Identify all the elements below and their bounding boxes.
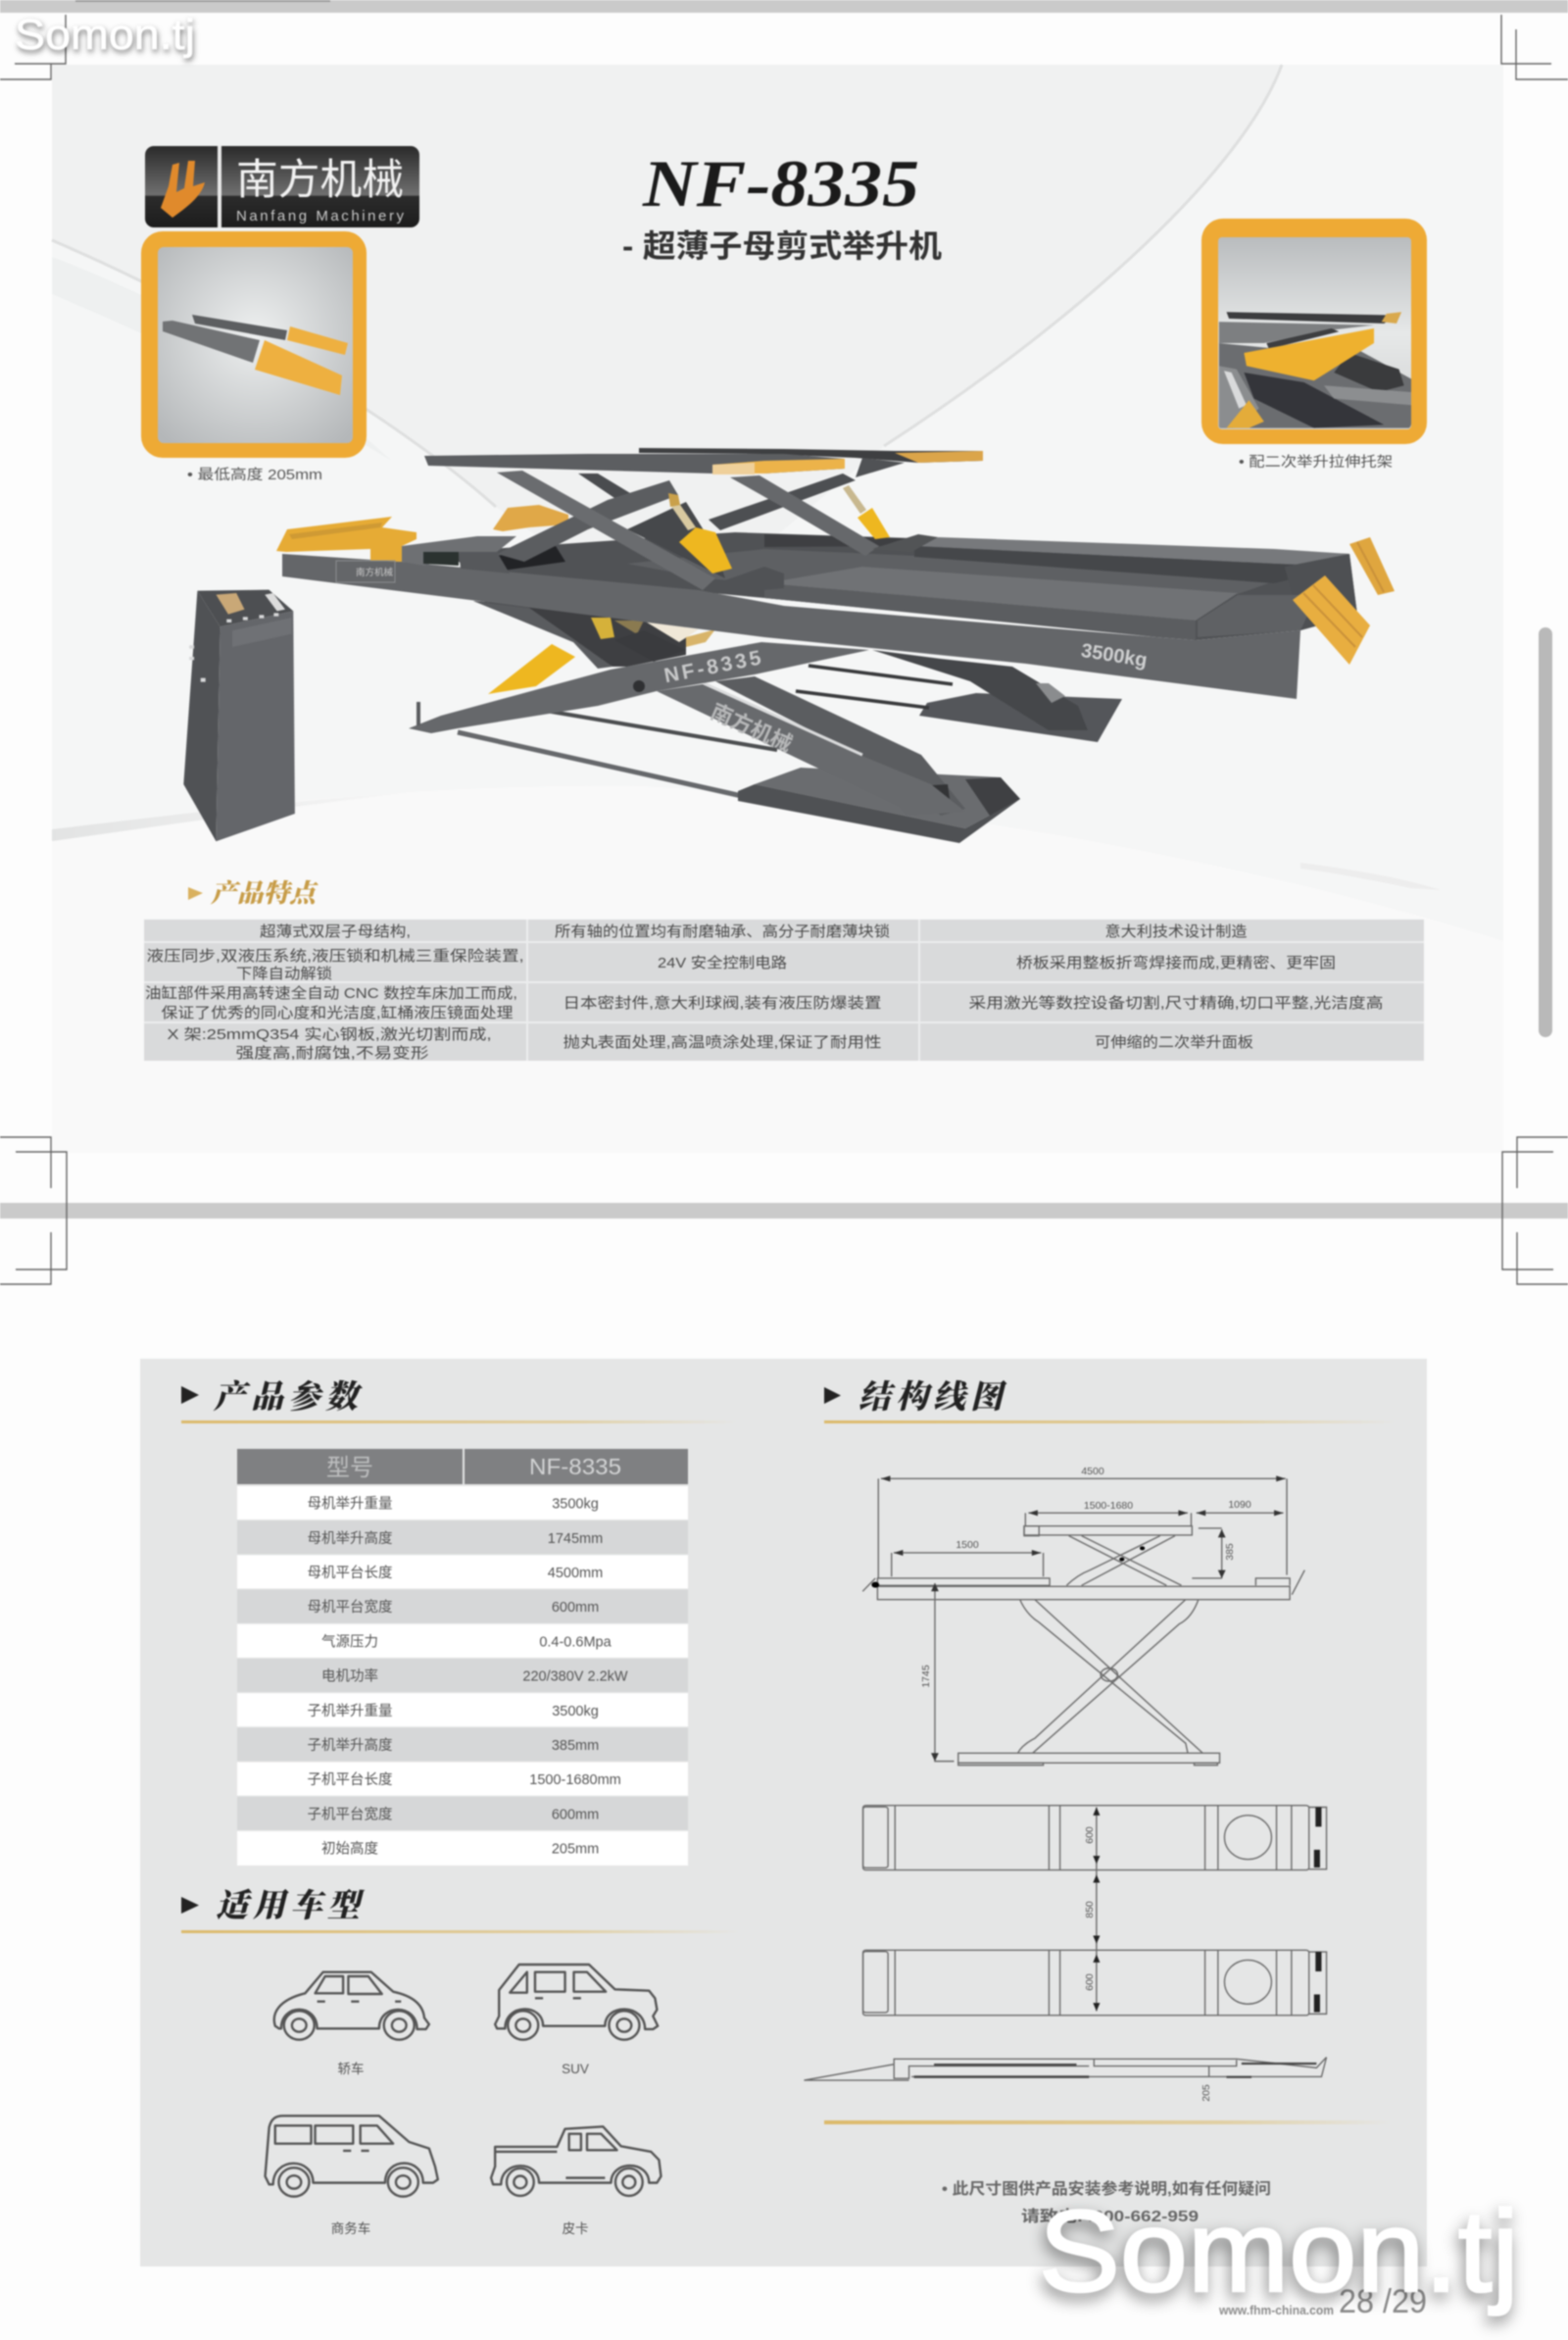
upper scissor back arms	[578, 473, 938, 556]
dimension arrowheads	[871, 1475, 1286, 1762]
table: parameters: 母机举升高度	[308, 1530, 392, 1547]
label: pickup: 皮卡	[563, 2221, 588, 2236]
diagram: top plan view: 600	[1084, 1973, 1096, 1991]
footer: website and page number	[1218, 2283, 1427, 2320]
yellow ramps left	[276, 517, 416, 562]
icon: van	[266, 2116, 438, 2197]
table: product features: 采用激光等数控设备切割,尺寸精确,切口平整,光洁度高	[968, 994, 1384, 1012]
table: product features: 意大利技术设计制造	[1105, 922, 1247, 940]
heading: structure drawing	[824, 1379, 1396, 1423]
diagram: top plan view	[863, 1806, 1327, 2016]
back lower arm	[715, 676, 965, 816]
heading: structure drawing: 结构线图	[858, 1379, 1007, 1416]
connecting rods	[458, 711, 777, 796]
table: product features: X 架:25mmQ354 实心钢板,激光切割而成,	[167, 1025, 492, 1043]
diagram: top plan view: 850	[1084, 1901, 1096, 1918]
table: product features: 所有轴的位置均有耐磨轴承、高分子耐磨薄块锁	[555, 923, 890, 940]
diagram: profile view	[804, 2058, 1327, 2102]
main side beam	[282, 554, 1300, 699]
table: product features: 强度高,耐腐蚀,不易变形	[235, 1044, 429, 1062]
table: parameters: 0.4-0.6Mpa	[539, 1634, 612, 1650]
table: parameters: 气源压力	[321, 1633, 378, 1650]
section: structure line drawing	[804, 1379, 1396, 2225]
upper scissor front arms	[497, 471, 784, 593]
main platform base	[446, 532, 1357, 640]
heading: product features: 产品特点	[210, 879, 318, 908]
scrollbar	[1539, 627, 1552, 1037]
note: dimensions disclaimer	[942, 2179, 1271, 2225]
diagram: side elevation with dimensions: 1090	[1228, 1499, 1251, 1511]
section: product parameters	[181, 1379, 737, 1866]
icon: sedan	[274, 1972, 429, 2040]
main image: scissor lift and control box: 南方机械	[708, 699, 796, 757]
label: SUV: SUV	[562, 2062, 589, 2076]
yellow lower cylinder	[488, 644, 575, 694]
heading: applicable vehicles: 适用车型	[216, 1888, 366, 1924]
top grey bar	[0, 0, 1568, 13]
table: product features: 桥板采用整板折弯焊接而成,更精密、更牢固	[1016, 954, 1336, 971]
caption: secondary lift bracket: • 配二次举升拉伸托架	[1239, 454, 1393, 471]
table: product features: 下降自动解锁	[236, 966, 332, 982]
diagram: side elevation with dimensions: 1500-1680	[1084, 1500, 1133, 1512]
mini logo on beam	[336, 561, 395, 582]
photo: secondary lift bracket	[1201, 219, 1427, 444]
icon: SUV	[495, 1965, 658, 2040]
table: product features	[144, 920, 1424, 1062]
table: parameters: 4500mm	[548, 1566, 603, 1581]
diagram: side elevation with dimensions: 1500	[956, 1539, 979, 1551]
yellow ramp middle	[493, 505, 568, 531]
label: van: 商务车	[331, 2220, 370, 2236]
diagram: side elevation with dimensions	[862, 1466, 1304, 1766]
table: parameters: 220/380V 2.2kW	[522, 1669, 628, 1685]
table: product features: 抛丸表面处理,高温喷涂处理,保证了耐用性	[563, 1034, 882, 1051]
caption: lowest height: • 最低高度 205mm	[187, 467, 322, 483]
table: parameters: 子机举升重量	[308, 1703, 392, 1719]
logo: Nanfang Machinery: 南方机械	[236, 157, 404, 204]
table: parameters: 600mm	[552, 1807, 599, 1822]
background lower sweep	[52, 786, 1503, 1153]
black end stops	[1093, 1808, 1321, 2013]
logo: Nanfang Machinery	[145, 146, 419, 227]
watermark: small top-left: Somon.tj	[15, 11, 195, 59]
mini logo on beam: 南方机械	[356, 567, 393, 578]
note: dimensions disclaimer: • 此尺寸图供产品安装参考说明,如有任何疑问	[942, 2179, 1271, 2198]
table: parameters: 205mm	[552, 1842, 599, 1858]
table: parameters: 子机举升高度	[308, 1737, 392, 1754]
table: parameters: 子机平台宽度	[308, 1806, 392, 1822]
background lens shape	[52, 65, 1282, 627]
table: parameters: 子机平台长度	[308, 1771, 392, 1788]
panel: lower specifications page	[140, 1359, 1427, 2266]
photo: lowest height detail	[141, 231, 367, 458]
table: product features: 可伸缩的二次举升面板	[1095, 1033, 1253, 1051]
page background	[52, 65, 1503, 1153]
panel: upper product page	[52, 65, 1503, 1153]
table: parameters: 1500-1680mm	[529, 1772, 621, 1788]
table: parameters: 型号	[326, 1455, 373, 1481]
title: NF-8335	[642, 146, 919, 221]
table: parameters: 385mm	[552, 1738, 599, 1754]
footer: website and page number: www.fhm-china.com	[1218, 2303, 1334, 2317]
table: product features: 24V 安全控制电路	[658, 954, 787, 971]
table: parameters: 初始高度	[321, 1841, 378, 1858]
table: product features: 保证了优秀的同心度和光洁度,缸桶液压镜面处理	[161, 1004, 514, 1021]
table: parameters: 3500kg	[552, 1704, 599, 1719]
table: parameters: NF-8335	[529, 1454, 621, 1479]
logo: Nanfang Machinery: Nanfang Machinery	[236, 208, 404, 224]
diagram: side elevation with dimensions: 385	[1224, 1543, 1236, 1561]
heading: product parameters: 产品参数	[213, 1379, 363, 1416]
table: parameters	[237, 1449, 688, 1866]
sub-lift platforms	[424, 448, 983, 477]
yellow upper cylinders	[668, 485, 890, 573]
lift lettering: NF-8335	[662, 647, 763, 687]
heading: product parameters	[181, 1379, 737, 1423]
icon: logo emblem	[161, 161, 205, 218]
far runway panel	[914, 537, 1357, 630]
table: parameters: 电机功率	[321, 1668, 378, 1685]
middle grey divider bar	[0, 1203, 1568, 1219]
table: product features: 油缸部件采用高转速全自动 CNC 数控车床加工而成,	[145, 984, 517, 1002]
table: parameters: 母机平台宽度	[308, 1599, 392, 1616]
section: applicable vehicles	[181, 1888, 740, 2236]
far lower scissor and base	[796, 650, 1122, 742]
diagram: side elevation with dimensions: 4500	[1081, 1466, 1104, 1477]
diagram: top plan view: 600	[1084, 1826, 1096, 1844]
subtitle: - 超薄子母剪式举升机	[622, 228, 942, 264]
near lower base	[738, 768, 1020, 843]
near lid panel	[764, 567, 1317, 640]
background left sweep	[52, 257, 392, 461]
table: parameters: 1745mm	[548, 1531, 603, 1547]
left top plate and mechanism	[402, 536, 565, 573]
table: parameters: 600mm	[552, 1600, 599, 1616]
diagram: profile view: 205	[1200, 2084, 1212, 2102]
footer: website and page number: 28 /29	[1339, 2283, 1427, 2320]
main image: scissor lift and control box	[183, 448, 1395, 843]
main image: scissor lift and control box: 3500kg	[1080, 640, 1149, 672]
note: dimensions disclaimer: 请致电:4000-662-959	[1021, 2207, 1199, 2225]
table: product features: 超薄式双层子母结构,	[260, 923, 411, 940]
table: parameters: 母机举升重量	[308, 1496, 392, 1513]
profile dark rails	[914, 2063, 1316, 2078]
divider rule	[824, 2120, 1392, 2124]
table: product features: 日本密封件,意大利球阀,装有液压防爆装置	[563, 994, 882, 1012]
background curves	[52, 65, 1282, 507]
watermark: large bottom-right: Somon.tj	[1039, 2187, 1519, 2316]
long lower arm	[409, 642, 869, 733]
table: parameters: 3500kg	[552, 1497, 599, 1513]
crop marks	[0, 15, 1568, 1284]
table: product features: 液压同步,双液压系统,液压锁和机械三重保险装置,	[147, 948, 523, 965]
diagram: side elevation with dimensions: 1745	[920, 1665, 932, 1688]
icon: pickup	[491, 2126, 661, 2196]
front lower arm	[657, 683, 965, 816]
label: sedan: 轿车	[337, 2061, 365, 2076]
yellow ramps right	[1293, 537, 1395, 665]
table: parameters: 母机平台长度	[308, 1565, 392, 1581]
control cabinet	[183, 590, 295, 841]
heading: applicable vehicles	[181, 1888, 740, 1933]
under-beam joints	[473, 601, 715, 669]
